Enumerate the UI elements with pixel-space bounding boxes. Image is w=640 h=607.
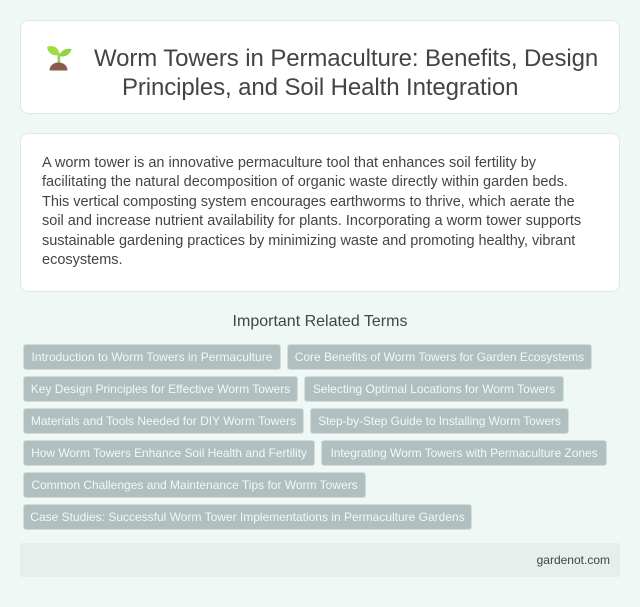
tag: Key Design Principles for Effective Worm Towers [31,382,290,396]
tag: Integrating Worm Towers with Permaculture Zones [330,446,598,460]
header panel [20,20,620,114]
related terms heading: Important Related Terms [233,313,407,330]
tag [310,408,569,434]
title: Principles, and Soil Health Integration [122,74,518,101]
tag [287,344,592,370]
tag: Selecting Optimal Locations for Worm Towers [313,382,555,396]
related terms tags [23,344,607,530]
icon: seedling [47,46,72,70]
tag [23,440,315,466]
description text: sustainable gardening practices by minimizing waste and promoting healthy, vibrant [42,233,575,249]
tag: Materials and Tools Needed for DIY Worm Towers [31,414,296,428]
tag [23,344,281,370]
tag: How Worm Towers Enhance Soil Health and Fertility [31,446,307,460]
description text: A worm tower is an innovative permaculture tool that enhances soil fertility by [42,155,536,171]
description text: soil and increase nutrient availability for plants. Incorporating a worm tower supports [42,213,581,229]
description text: This vertical composting system encourages earthworms to thrive, which aerate the [42,194,575,210]
description text: ecosystems. [42,252,123,268]
description panel [20,133,620,292]
tag [23,472,366,498]
tag: Case Studies: Successful Worm Tower Implementations in Permaculture Gardens [30,510,465,524]
title [94,45,598,101]
tag [23,376,298,402]
footer source: gardenot.com [537,553,610,567]
description text: facilitating the natural decomposition of organic waste directly within garden beds. [42,174,568,190]
tag: Introduction to Worm Towers in Permaculture [32,350,272,364]
tag [321,440,607,466]
title: Worm Towers in Permaculture: Benefits, Design [94,45,598,72]
tag [23,504,472,530]
tag [304,376,564,402]
tag: Core Benefits of Worm Towers for Garden Ecosystems [295,350,584,364]
tag: Step-by-Step Guide to Installing Worm Towers [318,414,561,428]
tag: Common Challenges and Maintenance Tips for Worm Towers [31,478,358,492]
tag [23,408,304,434]
description text [42,155,581,268]
footer bar [20,543,620,577]
